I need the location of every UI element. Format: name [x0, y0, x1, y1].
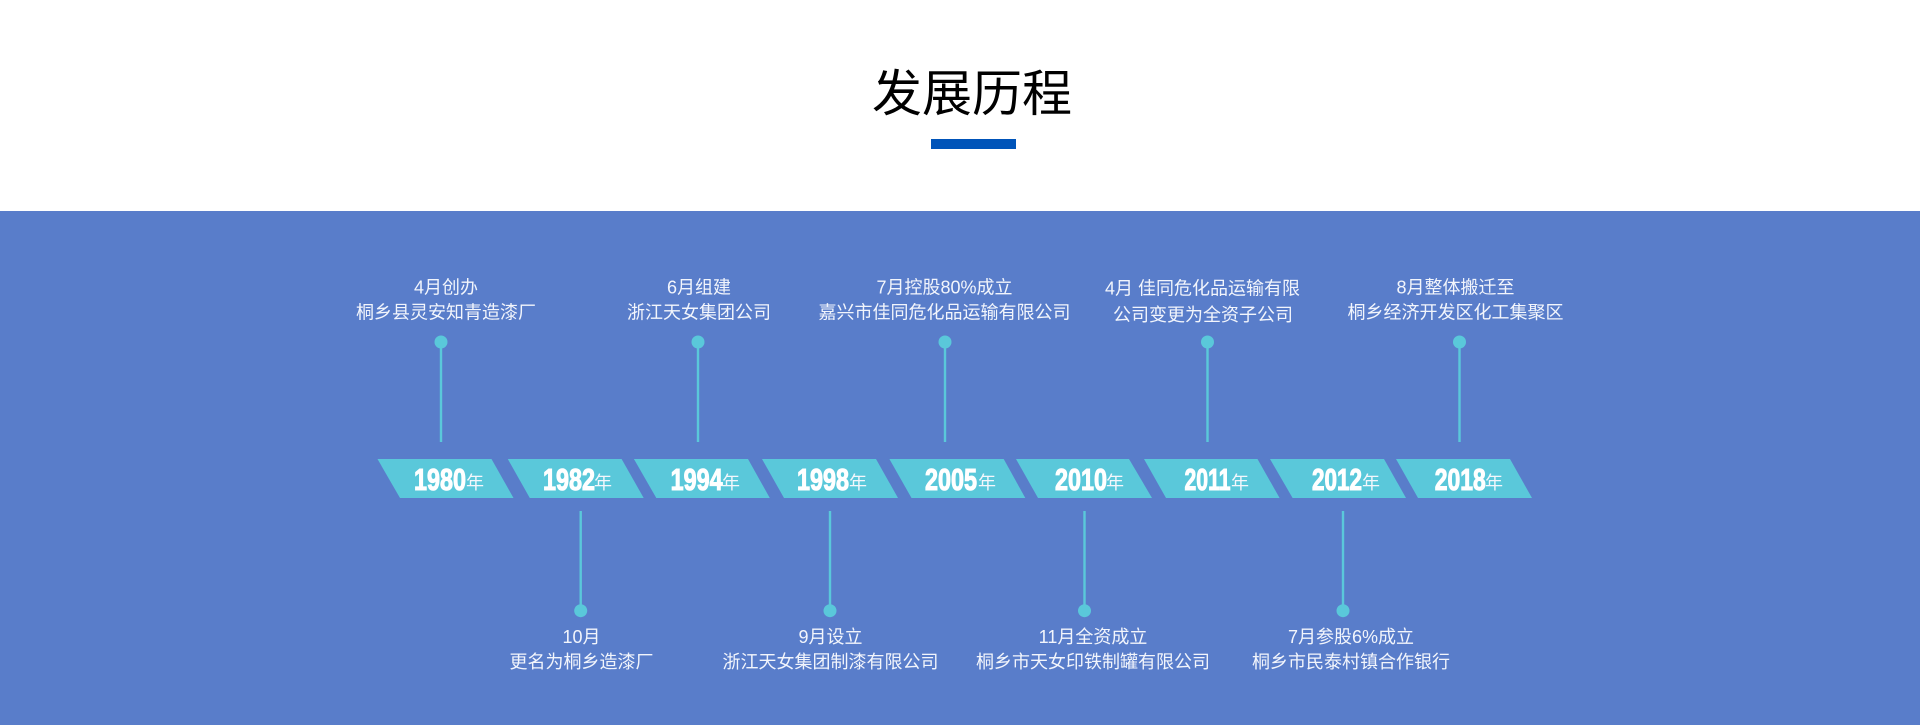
- title underline bar: [931, 139, 1016, 149]
- year tag: 2011: [1144, 459, 1280, 498]
- milestone: 2011 event: 4月 佳同危化品运输有限: [1105, 278, 1300, 298]
- milestone: 1980 event: [356, 278, 536, 442]
- year tag: 2010: 年: [1106, 473, 1124, 493]
- milestone: 2018 event: [1348, 278, 1564, 442]
- milestone: 1998 event: 9月设立: [798, 627, 863, 647]
- panel: timeline background: [0, 211, 1920, 725]
- milestone: 2010 event: [976, 511, 1210, 672]
- year tag: 2005: 2005: [925, 462, 977, 497]
- year tag: 2012: 2012: [1312, 462, 1362, 497]
- year tag: 2010: [1016, 459, 1152, 498]
- year tag: 1998: [762, 459, 898, 498]
- year tag: 1980: 1980: [414, 462, 466, 497]
- milestone: 2012 event: 7月参股6%成立: [1288, 627, 1414, 647]
- milestone: 1982 event: 更名为桐乡造漆厂: [510, 652, 654, 672]
- milestone: 2005 event: 7月控股80%成立: [876, 278, 1013, 298]
- year tag: 1998: 1998: [797, 462, 849, 497]
- milestone: 2005 event: 嘉兴市佳同危化品运输有限公司: [818, 302, 1070, 322]
- year tag: 2018: [1396, 459, 1532, 498]
- year tag: 2018: 年: [1485, 473, 1503, 493]
- milestone: 2018 event: 桐乡经济开发区化工集聚区: [1348, 302, 1564, 322]
- milestone: 1998 event: 浙江天女集团制漆有限公司: [722, 652, 938, 672]
- milestone: 2012 event: 桐乡市民泰村镇合作银行: [1252, 652, 1450, 672]
- year tag: 1994: 年: [722, 473, 740, 493]
- milestone: 1994 event: 浙江天女集团公司: [627, 302, 771, 322]
- milestone: 1994 event: [627, 278, 771, 442]
- year tag: 2005: [889, 459, 1025, 498]
- year tag: 2011: 2011: [1184, 462, 1230, 497]
- milestone: 2018 event: 8月整体搬迁至: [1396, 278, 1515, 298]
- year tag: 2010: 2010: [1055, 462, 1107, 497]
- year tag: 2012: [1270, 459, 1406, 498]
- year tag: 2005: 年: [978, 473, 996, 493]
- year tag: 1994: [634, 459, 770, 498]
- milestone: 1980 event: 4月创办: [414, 278, 478, 298]
- milestone: 2005 event: [818, 278, 1070, 442]
- milestone: 2012 event: [1252, 511, 1450, 672]
- milestone: 1980 event: 桐乡县灵安知青造漆厂: [356, 302, 536, 322]
- milestone: 2010 event: 桐乡市天女印铁制罐有限公司: [976, 652, 1210, 672]
- year tag: 1980: 年: [466, 473, 484, 493]
- year tag: 1980: [378, 459, 514, 498]
- milestone: 1994 event: 6月组建: [667, 278, 731, 298]
- milestone: 1982 event: 10月: [562, 627, 601, 647]
- year tag: 1982: 1982: [543, 462, 595, 497]
- year tag: 2012: 年: [1362, 473, 1380, 493]
- year tag: 2018: 2018: [1435, 462, 1486, 497]
- milestone: 1998 event: [722, 511, 938, 672]
- milestone: 2010 event: 11月全资成立: [1039, 627, 1147, 647]
- title: 发展历程: [872, 66, 1072, 122]
- year tag: 1994: 1994: [671, 462, 723, 497]
- year tag: 1998: 年: [849, 473, 867, 493]
- year tag: 2011: 年: [1231, 473, 1249, 493]
- year tag: 1982: 年: [594, 473, 612, 493]
- year tag: 1982: [508, 459, 644, 498]
- milestone: 2011 event: 公司变更为全资子公司: [1113, 305, 1293, 325]
- milestone: 2011 event: [1105, 278, 1300, 442]
- milestone: 1982 event: [510, 511, 654, 672]
